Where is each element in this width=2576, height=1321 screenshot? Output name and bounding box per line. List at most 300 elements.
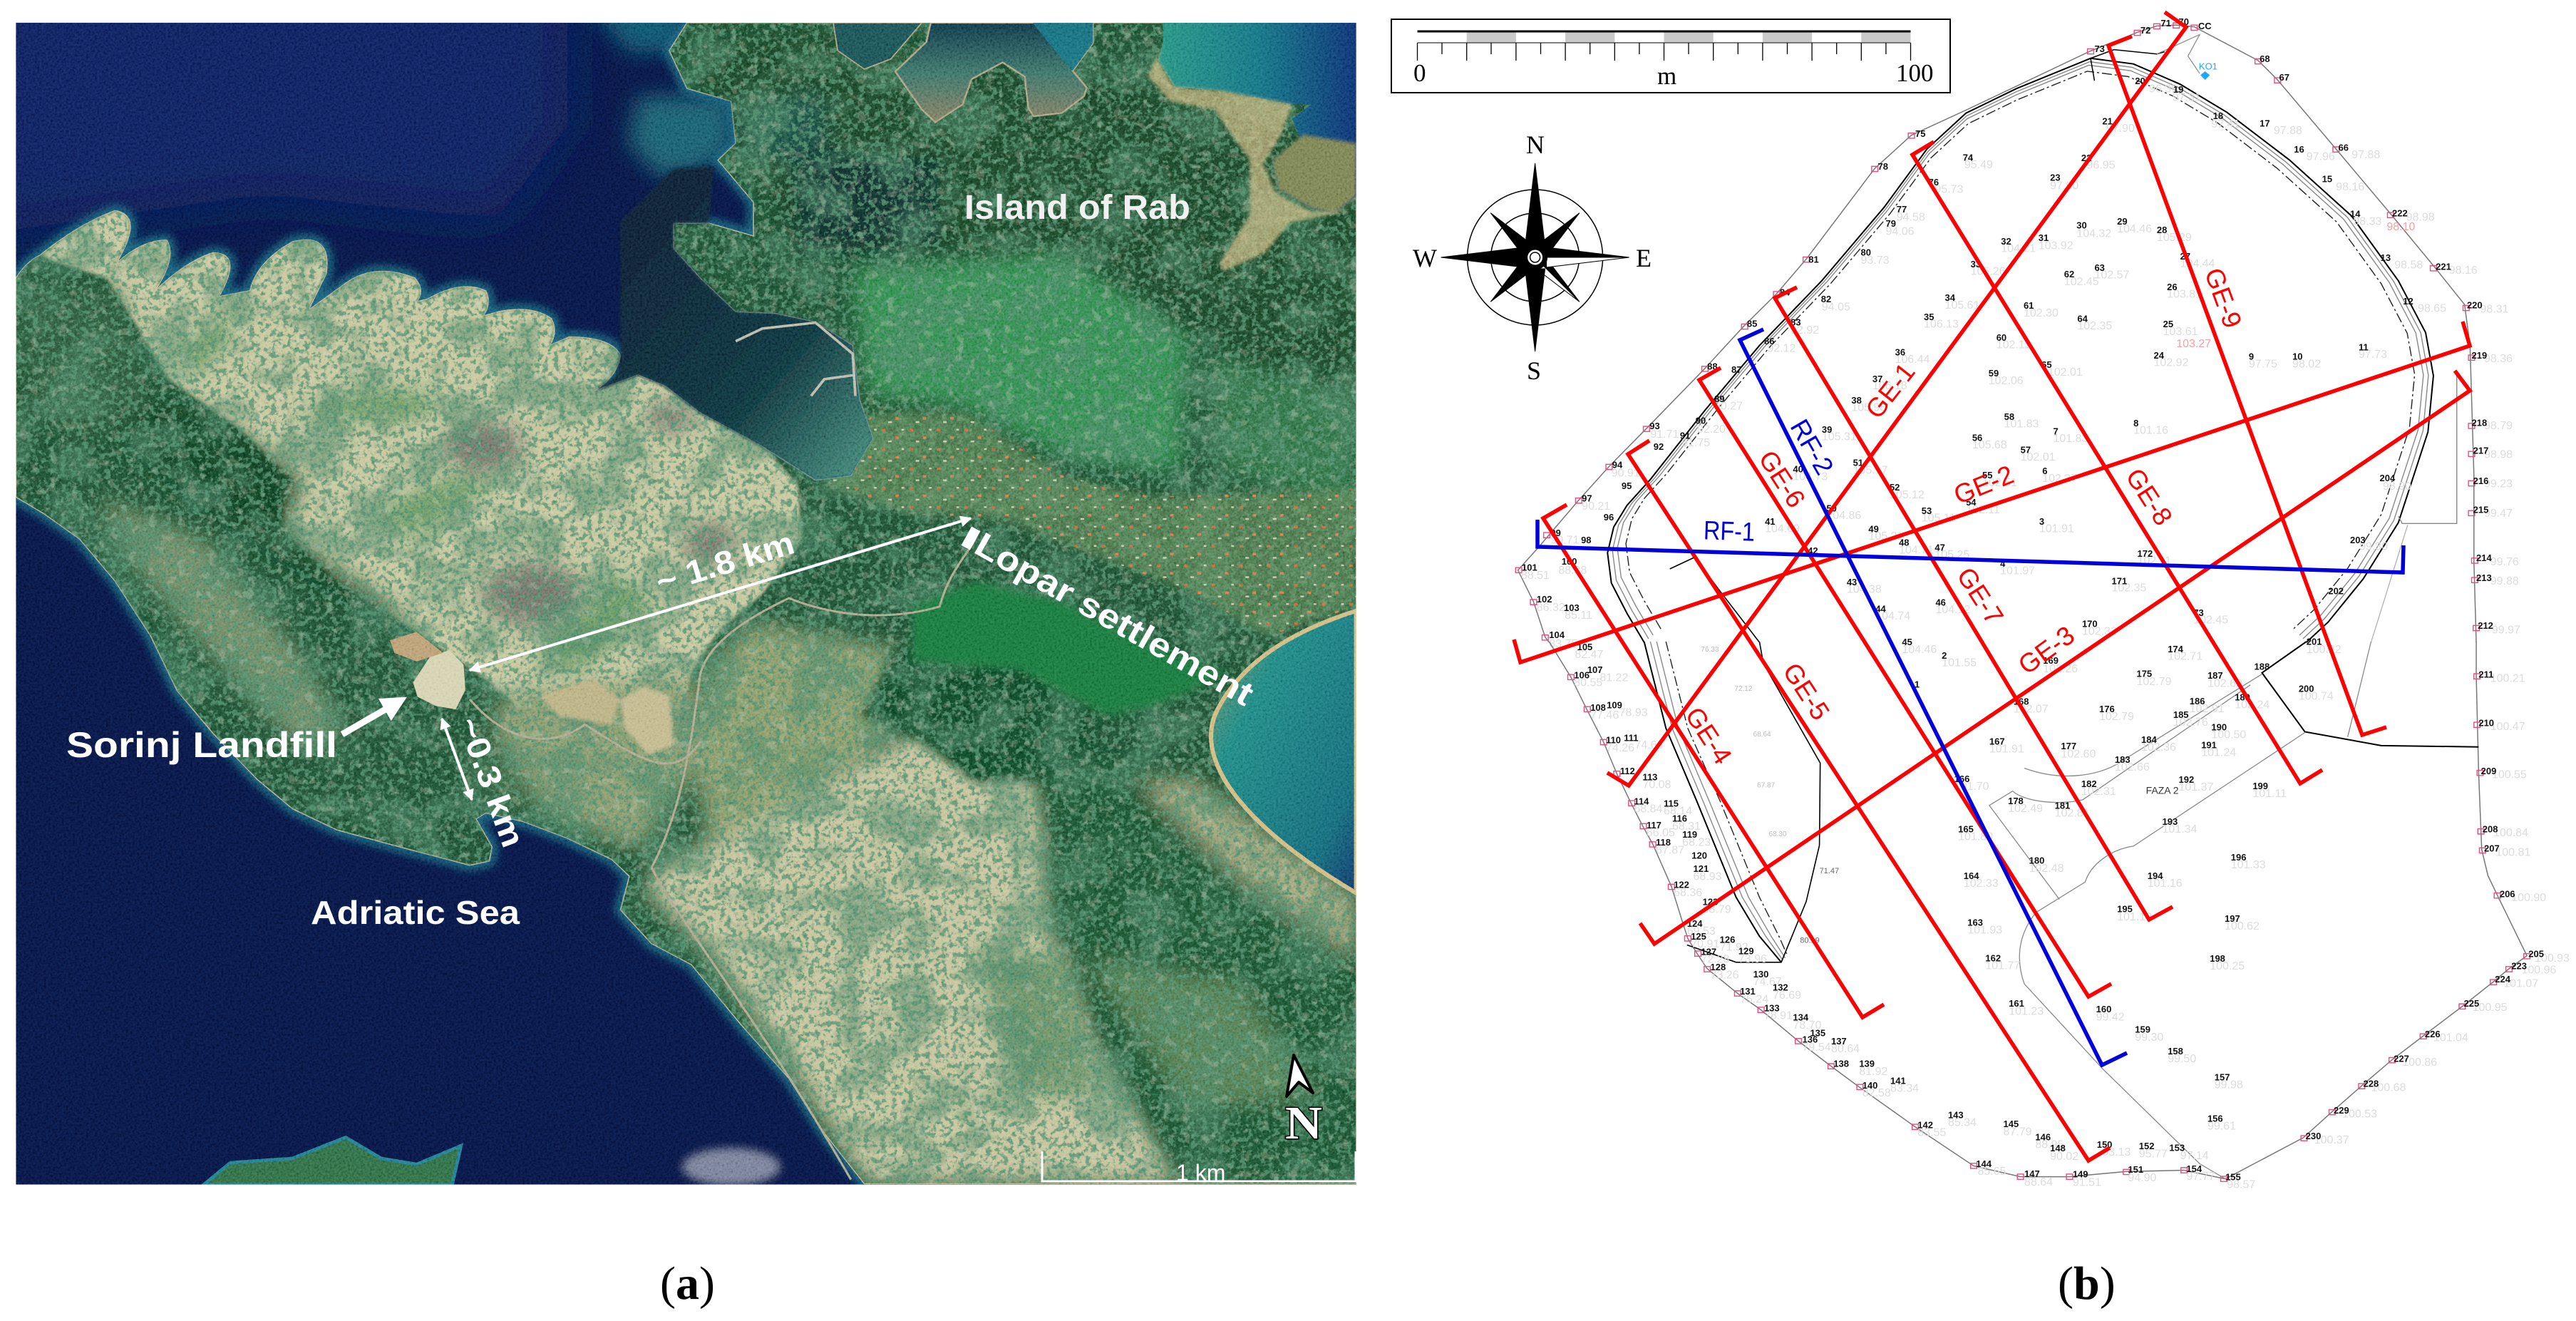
point numbers lower: 165	[1958, 823, 1974, 834]
elevation values upper: 102.45	[2064, 276, 2099, 288]
label: FAZA 2: FAZA 2	[2146, 785, 2179, 796]
elevation values lower: 91.51	[2073, 1176, 2101, 1188]
point numbers upper: 80	[1861, 247, 1871, 258]
point numbers upper: 103	[1564, 602, 1580, 613]
elevation values lower: 100.21	[2490, 672, 2525, 685]
elevation values lower: 102.81	[2055, 807, 2090, 820]
elevation values upper: 94.05	[1822, 301, 1850, 313]
profile RF-2	[1740, 329, 2127, 1065]
point numbers lower: 167	[1989, 736, 2005, 747]
point numbers lower: 142	[1917, 1119, 1933, 1130]
elevation values upper: 97.73	[2359, 349, 2387, 361]
elevation values upper: 105.26	[1971, 266, 2006, 278]
point numbers lower: 198	[2210, 953, 2225, 964]
point numbers upper: 89	[1714, 394, 1724, 404]
point numbers lower: 223	[2511, 960, 2527, 971]
elevation values lower: 102.48	[2029, 862, 2064, 875]
elevation values upper: 105.29	[2157, 232, 2192, 244]
elevation values upper: 102.27	[2042, 473, 2077, 485]
elevation values lower	[1574, 646, 2570, 1191]
profile GE-9	[2108, 36, 2386, 735]
point numbers upper: 65	[2041, 359, 2052, 370]
point numbers lower: 1	[1915, 679, 1920, 689]
profile GE-9: GE-9	[2199, 264, 2247, 332]
point numbers lower: 126	[1720, 934, 1735, 945]
elevation values lower: 80.55	[1574, 677, 1602, 689]
point numbers upper: 101	[1522, 562, 1537, 572]
well KO1 marker	[2199, 61, 2217, 80]
elevation values upper: 102.11	[1997, 339, 2031, 351]
elevation values lower: 101.04	[2433, 1031, 2468, 1044]
point numbers lower: 107	[1587, 664, 1603, 675]
panel: satellite map of the Island of Rab	[0, 0, 1356, 1186]
point numbers upper: 35	[1924, 312, 1934, 322]
point numbers upper: 82	[1821, 294, 1831, 304]
point numbers lower: 141	[1890, 1075, 1906, 1086]
elevation values lower: 102.66	[2115, 761, 2150, 773]
point numbers lower: 147	[2024, 1168, 2040, 1179]
point numbers upper: 44	[1875, 603, 1887, 614]
point numbers lower: 227	[2394, 1053, 2409, 1064]
point numbers upper: 58	[2004, 411, 2014, 422]
elevation values upper: 105.12	[1890, 489, 1925, 501]
point numbers upper: 27	[2180, 251, 2190, 262]
elevation values upper: 97.75	[2249, 358, 2277, 370]
elevation values upper: 97.90	[2050, 180, 2078, 192]
label: Sorinj Landfill: Sorinj Landfill	[66, 725, 337, 765]
elevation values upper: 102.51	[1982, 477, 2017, 489]
point numbers upper: 8	[2133, 418, 2138, 428]
point numbers upper: 19	[2173, 84, 2183, 95]
point numbers lower: 132	[1773, 982, 1788, 993]
elevation values lower: 100.84	[2493, 826, 2528, 839]
north-eastern dark forest	[691, 34, 1356, 421]
profile GE-1	[1607, 12, 2186, 786]
point numbers lower: 108	[1590, 702, 1606, 713]
point numbers upper: 63	[2094, 262, 2105, 273]
elevation values upper: 98.98	[2406, 211, 2435, 223]
point numbers lower: 138	[1833, 1059, 1849, 1069]
elevation values upper: 100.22	[2307, 644, 2341, 656]
elevation values lower: 100.74	[2299, 689, 2334, 703]
elevation values lower: 101.37	[2178, 781, 2214, 793]
elevation values lower: 76.69	[1773, 989, 1801, 1002]
point numbers lower: 143	[1948, 1109, 1964, 1120]
elevation values lower: 99.50	[2168, 1052, 2196, 1065]
point numbers upper: 68	[2260, 53, 2270, 64]
point numbers upper: 24	[2154, 350, 2165, 361]
north arrow	[1285, 1055, 1322, 1149]
elevation values upper: 99.76	[2490, 556, 2519, 568]
elevation values upper: 104.38	[1847, 584, 1882, 596]
elevation values upper: 82.47	[1575, 649, 1603, 661]
point numbers upper: 17	[2260, 118, 2270, 128]
point numbers lower: 125	[1691, 931, 1706, 942]
point numbers upper: 102	[1537, 594, 1552, 605]
marker: Lopar start block	[962, 526, 980, 550]
point numbers upper: 88	[1707, 361, 1718, 372]
elevation values lower: 101.33	[2231, 858, 2266, 871]
point numbers lower: 194	[2148, 870, 2163, 881]
point numbers upper: 54	[1966, 497, 1977, 508]
elevation values upper: 92.92	[1791, 324, 1819, 336]
elevation values lower: 72.12	[1734, 685, 1753, 693]
point numbers upper: 216	[2473, 476, 2488, 486]
elevation values upper: 105.17	[1853, 464, 1888, 476]
point numbers upper: 204	[2380, 473, 2396, 483]
point numbers lower: 123	[1703, 896, 1718, 907]
elevation values lower: 71.92	[1720, 940, 1748, 953]
point numbers upper: 30	[2076, 220, 2087, 230]
elevation values upper: 98.02	[2292, 358, 2321, 370]
elevation values lower: 100.96	[2521, 964, 2556, 977]
point numbers upper: 99	[1550, 528, 1561, 538]
elevation values lower: 102.91	[2190, 702, 2225, 715]
elevation values lower: 102.31	[2081, 785, 2116, 798]
profile GE-7: GE-7	[1951, 562, 2009, 629]
internal phase lines	[1989, 642, 2371, 1179]
profile GE-6: GE-6	[1753, 446, 1811, 513]
photographic grain	[16, 23, 1356, 1185]
point numbers upper: 73	[2094, 43, 2105, 54]
point numbers upper: 220	[2467, 299, 2483, 310]
scale bar 0-100 m	[1391, 19, 1950, 93]
boundary survey squares upper	[1515, 23, 2479, 640]
point numbers upper: 86	[1764, 336, 1774, 346]
elevation values lower: 101.23	[2009, 1004, 2044, 1017]
point numbers upper: 75	[1915, 128, 1925, 139]
elevation values upper: 101.55	[1942, 657, 1977, 669]
arrow: 1.8 km distance	[470, 518, 971, 670]
plan boundary upper	[1518, 25, 2476, 642]
point numbers lower: 106	[1574, 670, 1590, 681]
point numbers lower: 139	[1859, 1059, 1875, 1069]
profile GE-4: GE-4	[1679, 702, 1738, 769]
elevation values upper: 99.47	[2484, 508, 2513, 520]
scale bar 0-100 m: 100	[1896, 59, 1933, 87]
point numbers upper: 56	[1972, 433, 1982, 443]
elevation values lower: 101.07	[2503, 977, 2538, 990]
point numbers lower: 119	[1682, 829, 1697, 840]
elevation values upper: 106.13	[1924, 319, 1959, 331]
elevation values lower: 85.65	[1977, 1165, 2006, 1178]
elevation values upper: 105.25	[1934, 549, 1969, 561]
point numbers upper: 2	[1942, 650, 1947, 661]
elevation values lower: 101.80	[1958, 830, 1993, 843]
point numbers lower: 152	[2139, 1141, 2154, 1151]
point numbers upper: 76	[1929, 177, 1939, 187]
elevation values lower: 88.64	[2024, 1176, 2053, 1188]
point numbers lower: 118	[1656, 837, 1671, 848]
point numbers lower: 176	[2099, 704, 2115, 714]
elevation values upper: 99.97	[2492, 624, 2520, 637]
elevation values upper: 104.46	[1902, 644, 1937, 656]
point numbers upper: 12	[2403, 296, 2413, 307]
middle dark forest band	[860, 649, 1099, 783]
elevation values upper: 96.39	[2149, 83, 2178, 95]
elevation values upper: 98.79	[2484, 420, 2513, 432]
elevation values lower: 80.64	[1831, 1042, 1860, 1055]
point numbers lower: 154	[2186, 1163, 2203, 1174]
point numbers upper: 70	[2178, 16, 2189, 27]
caption: (b): (b)	[2058, 1258, 2116, 1310]
south-eastern pale limestone	[647, 733, 1179, 1183]
point numbers upper: 84	[1780, 287, 1791, 297]
point numbers lower: 146	[2035, 1131, 2051, 1142]
elevation values lower: 100.55	[2492, 768, 2527, 781]
point numbers upper: 53	[1922, 505, 1932, 516]
elevation values lower: 71.47	[1820, 867, 1839, 875]
point numbers lower: 211	[2478, 669, 2493, 679]
point numbers lower: 136	[1803, 1034, 1818, 1045]
north arrow: N	[1285, 1097, 1322, 1149]
elevation values upper: 101.83	[2004, 418, 2039, 431]
elevation values upper: 99.88	[2490, 575, 2519, 587]
elevation values lower: 69.53	[1687, 925, 1716, 937]
elevation values upper: 104.32	[2076, 227, 2111, 240]
elevation values lower: 99.30	[2135, 1031, 2163, 1044]
elevation values lower: 80.19	[1800, 936, 1820, 945]
elevation values upper: 88.51	[1521, 570, 1550, 582]
elevation values upper: 96.95	[2087, 160, 2116, 172]
elevation values upper: 90.27	[1714, 401, 1743, 413]
point numbers upper: 3	[2039, 516, 2044, 527]
point numbers upper: 61	[2024, 300, 2034, 311]
profile RF-1: RF-1	[1703, 515, 1756, 547]
elevation values lower: 100.81	[2495, 845, 2530, 858]
elevation values upper: 99.30	[2359, 541, 2388, 553]
elevation values upper: 101.91	[2039, 523, 2074, 535]
elevation values upper: 105.98	[1851, 401, 1886, 413]
elevation values upper: 104.73	[1793, 471, 1828, 483]
compass rose: E	[1636, 244, 1652, 272]
elevation values upper: 98.10	[2386, 221, 2415, 233]
point numbers lower: 149	[2073, 1169, 2088, 1180]
point numbers lower: 122	[1674, 880, 1689, 890]
elevation values lower: 94.90	[2128, 1171, 2157, 1184]
elevation values lower: 101.16	[2148, 877, 2183, 890]
elevation values lower: 100.93	[2535, 952, 2570, 965]
landfill perimeter road upper	[1607, 58, 2433, 642]
point numbers upper: 38	[1851, 395, 1862, 406]
point numbers upper: 66	[2339, 142, 2349, 153]
landfill perimeter road lower	[1644, 642, 2478, 962]
point numbers lower: 230	[2306, 1131, 2321, 1141]
profile RF-2: RF-2	[1785, 414, 1839, 480]
point numbers lower: 133	[1764, 1002, 1780, 1013]
green gullies on the plateau	[177, 312, 656, 674]
profile GE-7	[1775, 287, 2173, 920]
elevation values upper: 104.86	[1826, 510, 1861, 522]
elevation values lower: 102.33	[1964, 877, 1999, 890]
elevation values lower: 66.05	[1647, 826, 1675, 839]
point numbers upper: 222	[2392, 207, 2408, 218]
point numbers upper: 36	[1895, 347, 1905, 358]
point numbers upper: 81	[1808, 254, 1819, 264]
scale bar 1 km	[1042, 1151, 1356, 1186]
elevation values upper: 105.68	[1972, 439, 2007, 451]
point numbers upper: 18	[2213, 110, 2223, 121]
elevation values lower: 100.90	[2511, 891, 2546, 904]
plan boundary lower	[1549, 642, 2527, 1179]
elevation values upper: 104.74	[1875, 610, 1910, 622]
profile GE-8: GE-8	[2120, 463, 2178, 530]
point numbers lower: 228	[2364, 1079, 2379, 1089]
point numbers lower: 193	[2163, 816, 2178, 827]
elevation values lower: 102.79	[2136, 675, 2171, 688]
point numbers upper: 219	[2472, 350, 2487, 361]
elevation values lower: 100.68	[2371, 1081, 2406, 1094]
point numbers upper: 10	[2292, 351, 2303, 362]
elevation values lower: 68.36	[1674, 886, 1702, 899]
elevation values lower: 99.61	[2207, 1119, 2236, 1132]
elevation values lower: 101.77	[1985, 960, 2020, 972]
point numbers lower: 151	[2128, 1164, 2143, 1175]
elevation values lower: 102.76	[2173, 716, 2208, 729]
elevation values upper: 102.30	[2024, 307, 2059, 319]
point numbers upper: 50	[1826, 503, 1837, 513]
point numbers lower: 185	[2173, 709, 2189, 720]
elevation values upper: 101.16	[2133, 425, 2168, 437]
point numbers upper: 64	[2077, 313, 2088, 324]
elevation values upper: 95.49	[1964, 159, 1993, 171]
elevation values upper	[1521, 83, 2520, 669]
grey burnt patches	[443, 402, 815, 706]
point numbers lower: 207	[2484, 843, 2500, 854]
elevation values lower: 97.14	[2180, 1149, 2209, 1162]
point numbers upper: 22	[2081, 153, 2091, 163]
point numbers lower: 206	[2500, 888, 2515, 899]
elevation values upper: 105.11	[1922, 513, 1956, 525]
elevation values upper: 98.98	[2484, 449, 2513, 461]
point numbers lower: 137	[1831, 1036, 1847, 1047]
point numbers upper: 171	[2111, 576, 2127, 587]
point numbers upper: 94	[1612, 460, 1623, 471]
point numbers lower: 168	[2014, 697, 2029, 707]
point numbers upper: 7	[2054, 426, 2059, 436]
elevation values lower: 81.22	[1599, 671, 1628, 684]
site plan: upper part labels and lines	[1515, 16, 2520, 669]
elevation values lower: 68.79	[1703, 903, 1731, 916]
elevation values lower: 70.08	[1642, 778, 1671, 791]
elevation values upper: 99.23	[2484, 478, 2513, 490]
point numbers lower: 157	[2215, 1072, 2230, 1083]
elevation values upper: 94.58	[1897, 211, 1925, 223]
point numbers upper: 79	[1885, 218, 1896, 229]
large scale vegetation mottling	[16, 23, 1356, 1185]
point numbers upper: 83	[1791, 317, 1801, 328]
scale bar 1 km: 1 km	[1176, 1160, 1225, 1186]
elevation values upper: 102.92	[2154, 356, 2189, 369]
profile GE-8	[1912, 142, 2322, 783]
point numbers lower: 164	[1964, 870, 1979, 881]
point numbers upper: 87	[1731, 364, 1742, 375]
point numbers upper: 29	[2117, 216, 2128, 227]
scale bar 0-100 m: 0	[1413, 59, 1426, 87]
elevation values lower: 98.57	[2227, 1178, 2255, 1191]
elevation values upper: 102.11	[2138, 555, 2171, 567]
elevation values upper: 106.44	[1895, 354, 1930, 366]
elevation values lower: 70.91	[1691, 937, 1719, 950]
elevation values upper: 98.16	[2336, 181, 2364, 193]
elevation values upper: 102.71	[2168, 650, 2203, 662]
point numbers lower: 192	[2178, 774, 2194, 785]
elevation values lower: 100.25	[2210, 960, 2245, 972]
elevation values lower: 87.79	[2004, 1125, 2032, 1138]
elevation values lower: 100.50	[2211, 729, 2246, 741]
elevation values upper: 104.12	[1935, 604, 1970, 616]
point numbers upper: 31	[2039, 232, 2049, 243]
land mass coastline halo	[16, 23, 1356, 1183]
point numbers lower: 113	[1642, 771, 1657, 782]
elevation values upper: 93.73	[1861, 255, 1890, 267]
elevation values lower: 101.93	[1967, 924, 2002, 937]
point numbers upper: 23	[2050, 173, 2061, 183]
point numbers upper: 217	[2473, 446, 2488, 456]
elevation values lower: 95.77	[2139, 1147, 2168, 1160]
pale clearings in forest	[16, 23, 1356, 1185]
point numbers upper: 93	[1649, 421, 1660, 431]
point numbers lower: 177	[2061, 741, 2076, 751]
point numbers upper: 221	[2436, 262, 2451, 272]
point numbers upper: 20	[2135, 76, 2145, 86]
elevation values lower: 100.86	[2402, 1056, 2437, 1069]
sea: northern lighter water	[0, 0, 731, 245]
scale bar 0-100 m: m	[1657, 62, 1676, 90]
east bay	[1211, 611, 1356, 893]
Lopar village strip	[825, 413, 1356, 636]
point numbers upper: 34	[1945, 292, 1956, 303]
elevation values upper: 98.90	[2383, 480, 2411, 493]
compass rose: S	[1527, 356, 1541, 385]
elevation values upper: 102.11	[1966, 504, 2000, 516]
elevation values upper: 98.36	[2484, 353, 2513, 365]
point numbers lower: 205	[2528, 948, 2544, 959]
point numbers lower: 160	[2096, 1004, 2111, 1014]
point numbers lower: 209	[2481, 766, 2496, 776]
elevation values lower: 101.34	[2163, 823, 2198, 836]
elevation values lower: 100.37	[2314, 1134, 2349, 1146]
point numbers lower: 135	[1810, 1028, 1825, 1039]
point numbers lower: 117	[1647, 820, 1661, 831]
point numbers lower: 114	[1634, 796, 1649, 806]
elevation values lower: 81.92	[1859, 1065, 1887, 1078]
elevation values upper: 104.69	[1765, 523, 1800, 535]
harbour pier	[736, 323, 855, 396]
elevation values lower: 83.34	[1890, 1082, 1919, 1095]
compass rose	[1413, 130, 1652, 385]
point numbers lower: 111	[1624, 733, 1638, 744]
elevation values upper: 104.71	[1899, 544, 1934, 556]
point numbers upper: 59	[1989, 368, 1999, 379]
elevation values lower: 68.30	[1769, 831, 1787, 838]
point numbers upper: 91	[1680, 430, 1690, 441]
point numbers upper: 170	[2082, 619, 2098, 629]
elevation values lower: 72.28	[1701, 952, 1730, 965]
point numbers upper: 202	[2328, 586, 2344, 597]
point numbers lower: 199	[2252, 781, 2268, 791]
point numbers lower: 187	[2207, 670, 2223, 681]
elevation values lower: 102.07	[2014, 703, 2049, 716]
elevation values upper: 91.75	[1681, 437, 1710, 449]
point numbers lower: 110	[1606, 735, 1621, 746]
point numbers lower: 197	[2225, 913, 2240, 924]
point numbers lower: 144	[1976, 1158, 1992, 1169]
elevation values lower: 101.11	[2252, 787, 2287, 800]
south-eastern forest	[975, 750, 1356, 1183]
point numbers lower: 161	[2009, 998, 2024, 1009]
southern islet	[204, 1137, 461, 1185]
